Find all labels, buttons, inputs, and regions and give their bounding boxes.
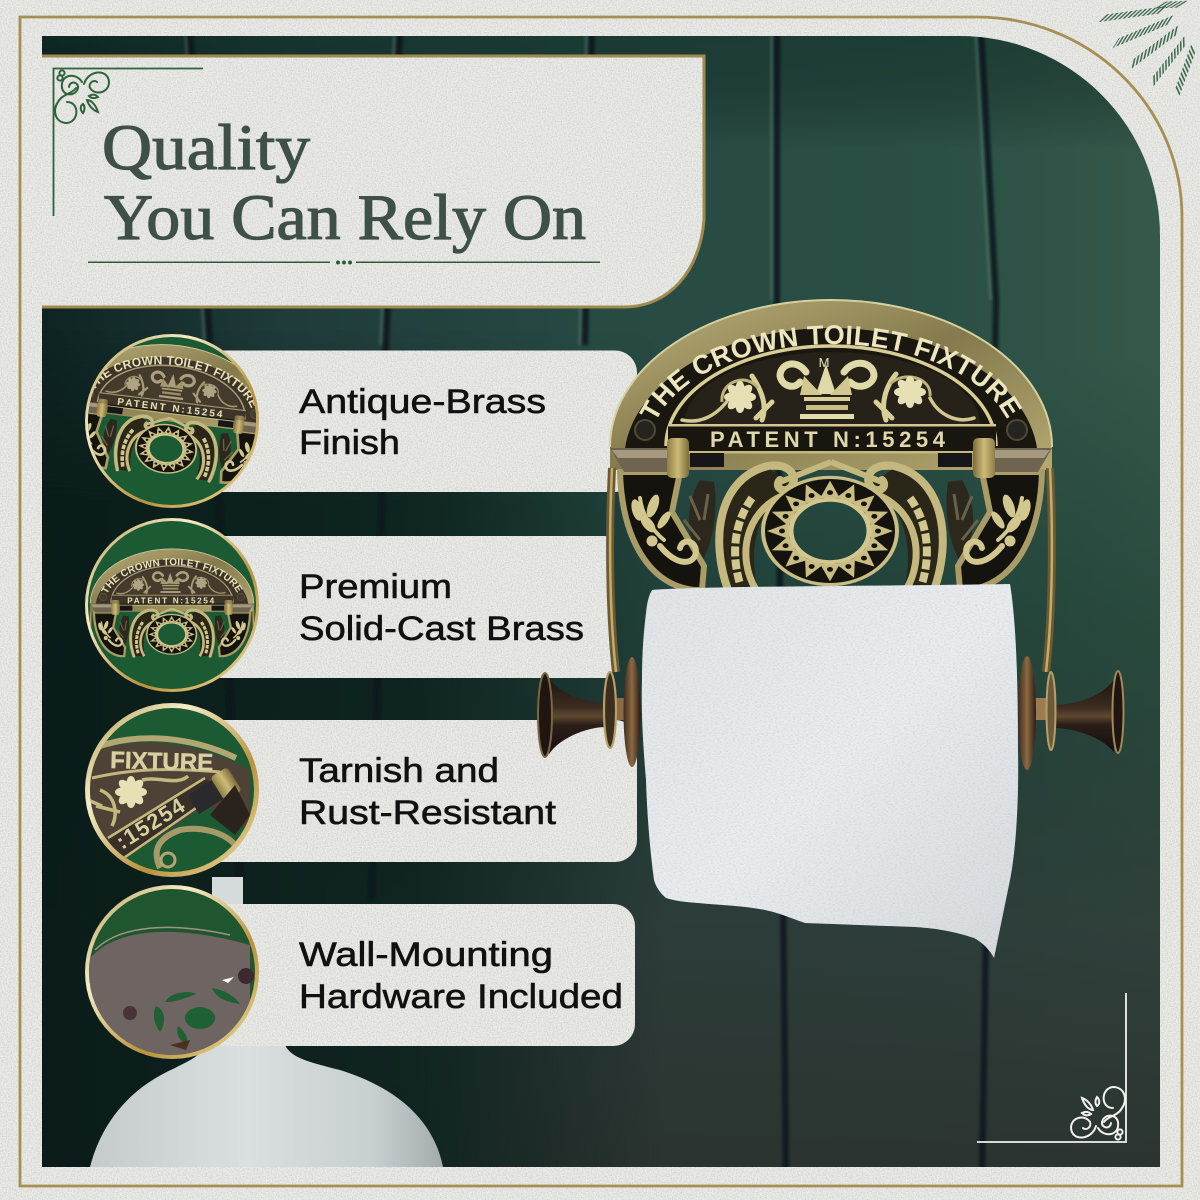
fixture plate: M [819,355,829,370]
title: Quality [102,112,311,184]
product: brass toilet roll holder [537,299,1124,958]
title: You Can Rely On [104,182,586,254]
icon: circle macro of FIXTURE lettering: FIXTURE [110,747,214,777]
icon: circle close-up of tilted fixture: THE CROWN TOILET FIXTURE [94,356,254,408]
label: Hardware Included [299,978,623,1016]
fixture plate: THE CROWN TOILET FIXTURE [639,325,1022,418]
feature 4: Wall-Mounting Hardware Included [80,880,635,1060]
white ceramic vase [90,877,443,1167]
feature 1: Antique-Brass Finish [85,334,637,508]
feature 2: Premium Solid-Cast Brass [85,518,612,692]
icon: circle close-up of tilted fixture: PATENT N:15254 [117,397,223,421]
icon: circle close-up of tilted fixture [85,334,259,508]
feature 3: Tarnish and Rust-Resistant [80,700,637,880]
icon: circle macro of FIXTURE lettering: :15254 [111,792,190,854]
panel: header title box [42,56,704,307]
icon: circle front view of fixture [85,518,259,692]
icon: circle front view of fixture: THE CROWN TOILET FIXTURE [101,558,243,593]
right knob [1018,656,1124,770]
fixture plate [606,299,1056,672]
tissue roll [642,584,1018,958]
label: Wall-Mounting [299,936,553,974]
divider with dots [88,260,600,264]
label: Rust-Resistant [299,794,557,832]
icon: circle front view of fixture: PATENT N:15254 [127,596,215,605]
fixture plate: PATENT N:15254 [710,427,946,452]
label: Premium [299,568,452,606]
label: Antique-Brass [299,383,546,421]
label: Finish [299,424,400,462]
corner ornament: white, bottom right [977,993,1126,1142]
corner ornament: green [54,68,203,216]
icon: circle view of plate back [85,885,259,1059]
label: Tarnish and [299,752,499,790]
label: Solid-Cast Brass [299,610,584,648]
decorative palm leaf, top right [1103,4,1193,94]
left knob [538,657,640,767]
icon: circle macro of FIXTURE lettering [85,703,259,877]
